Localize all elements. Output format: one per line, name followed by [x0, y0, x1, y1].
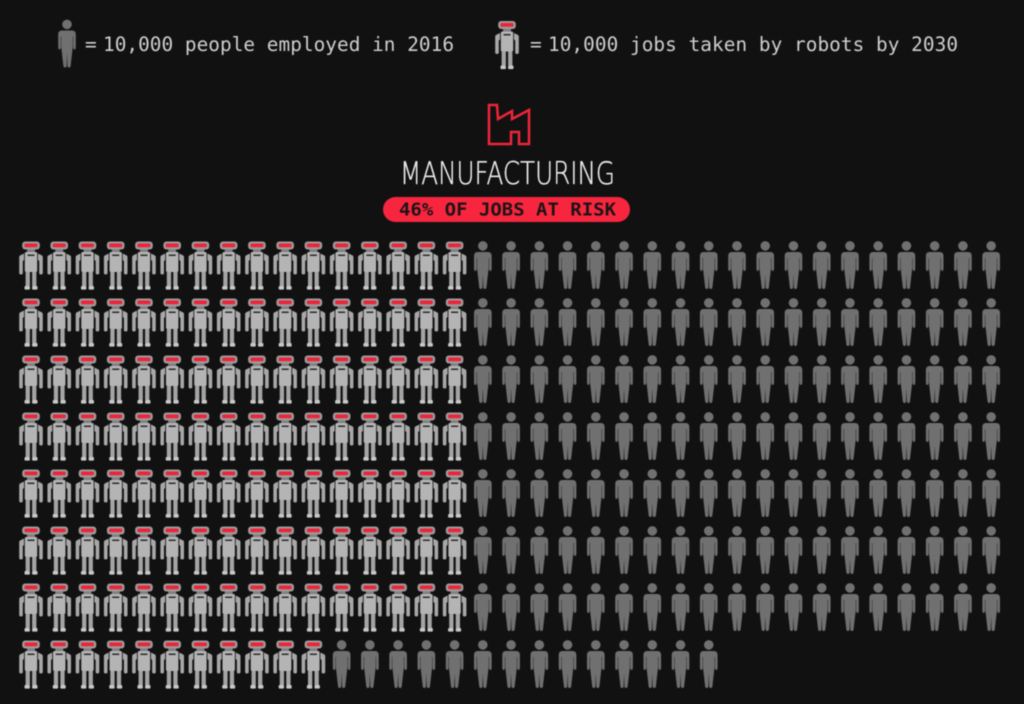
- row 2 robots: [19, 298, 466, 347]
- legend text: jobs taken by robots: 10,000 jobs taken by robots by 2030: [548, 33, 958, 56]
- row 4 robots: [19, 412, 466, 461]
- row 8 people: [333, 640, 718, 688]
- row 3 people: [474, 355, 1000, 403]
- row 4 people: [474, 412, 1000, 460]
- pictogram grid: [19, 241, 1000, 689]
- row 1 people: [474, 241, 1000, 289]
- row 5 people: [474, 469, 1000, 517]
- legend text: people employed: 10,000 people employed in 2016: [103, 33, 454, 56]
- icon: factory: [489, 105, 529, 144]
- row 7 robots: [19, 584, 466, 632]
- legend equals sign: =: [85, 33, 97, 56]
- icon: person: [58, 20, 76, 68]
- legend: robot: [495, 21, 958, 69]
- row 2 people: [474, 298, 1000, 346]
- risk badge: 46% OF JOBS AT RISK: [399, 200, 616, 220]
- icon: robot: [495, 21, 519, 69]
- legend: person: [58, 20, 454, 68]
- row 6 people: [474, 526, 1000, 574]
- legend equals sign: =: [530, 33, 542, 56]
- row 6 robots: [19, 526, 466, 575]
- row 5 robots: [19, 470, 466, 518]
- row 7 people: [474, 583, 1000, 631]
- heading: manufacturing: MANUFACTURING: [400, 156, 615, 192]
- row 1 robots: [19, 242, 466, 290]
- row 3 robots: [19, 356, 466, 404]
- row 8 robots: [19, 640, 325, 689]
